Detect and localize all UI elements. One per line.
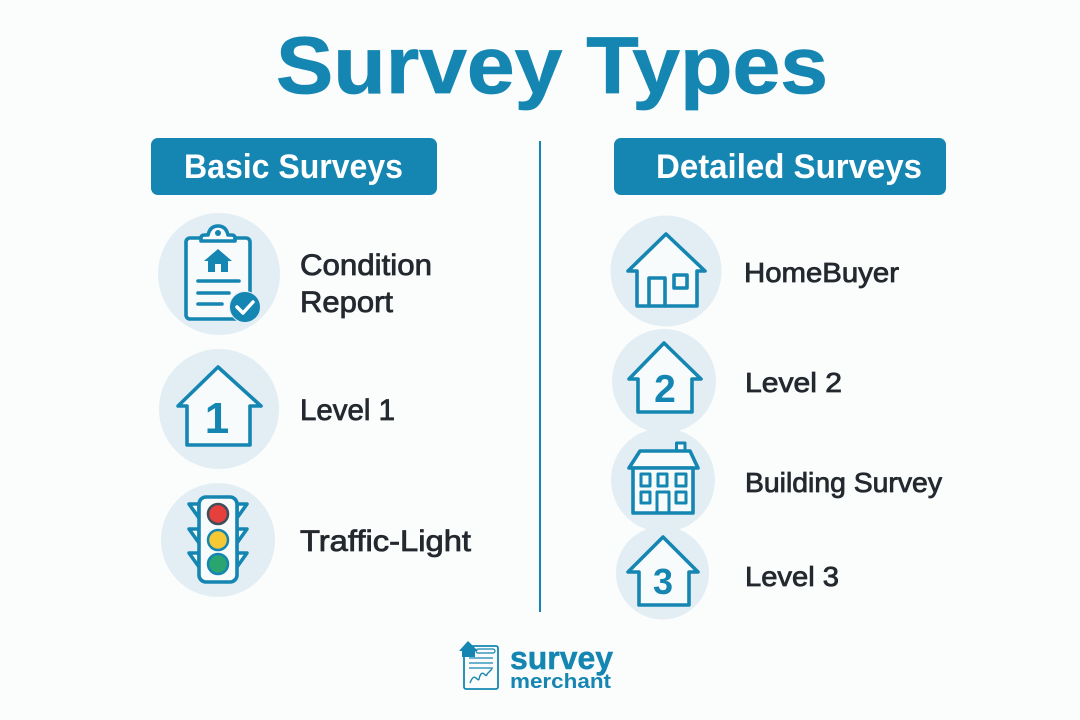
icon: level 1 house (159, 349, 279, 469)
icon: homebuyer house (610, 216, 722, 326)
title: Survey Types (276, 21, 828, 111)
icon: level 3 house: 3 (653, 561, 673, 602)
heading: detailed surveys: Detailed Surveys (656, 148, 922, 186)
label: level 2: Level 2 (745, 367, 842, 398)
icon: level 2 house: 2 (654, 368, 676, 411)
icon: condition report clipboard (158, 213, 280, 335)
logo wordmark: merchant: merchant (510, 671, 611, 693)
icon: traffic light (161, 483, 275, 597)
panel: detailed surveys (610, 138, 946, 620)
icon: level 3 house (616, 526, 709, 620)
center divider (539, 141, 541, 612)
icon: level 1 house: 1 (205, 394, 229, 443)
logo: survey merchant (459, 640, 613, 693)
label: building survey: Building Survey (745, 467, 942, 498)
label: traffic-light: Traffic-Light (300, 525, 472, 558)
label: condition: Condition (300, 249, 432, 282)
icon: logo document (459, 641, 498, 689)
heading: detailed surveys (614, 138, 946, 195)
label: report: Report (300, 286, 394, 319)
heading: basic surveys (151, 138, 437, 195)
label: level 1: Level 1 (300, 394, 395, 427)
label: homebuyer: HomeBuyer (744, 257, 899, 288)
icon: level 2 house (612, 329, 716, 433)
label: level 3: Level 3 (745, 561, 839, 592)
logo wordmark: survey: survey (510, 640, 613, 676)
icon: building survey (611, 428, 715, 532)
heading: basic surveys: Basic Surveys (184, 148, 403, 186)
panel: basic surveys (151, 138, 472, 597)
